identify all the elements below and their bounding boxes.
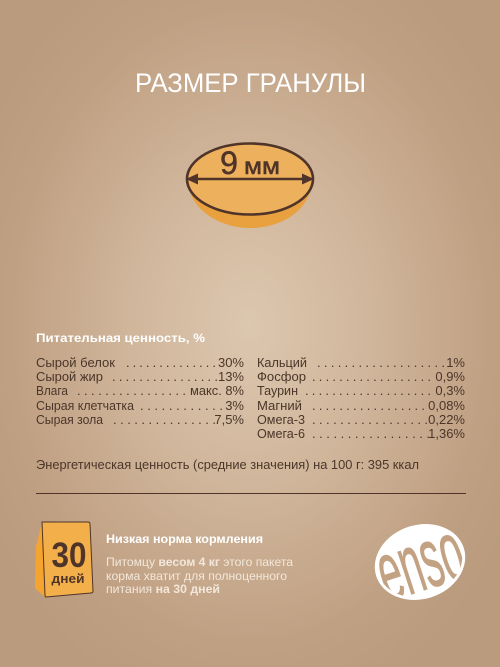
nutrition table: right column: 0,22% [428, 412, 465, 427]
icon: kibble granule with 9 mm size: 9 [220, 145, 238, 181]
nutrition table: right column [257, 355, 465, 441]
icon: kibble granule with 9 mm size: мм [244, 153, 280, 179]
nutrition table: right column: ................... [305, 383, 431, 398]
nutrition table: left column: 30% [218, 355, 244, 370]
nutrition table: right column: .................. [312, 369, 431, 384]
nutrition table: right column: 1,36% [428, 426, 465, 441]
nutrition table: right column: ................. [312, 412, 428, 427]
nutrition table: left column: Сырая клетчатка [36, 398, 135, 413]
nutrition table: left column: ................ [112, 369, 218, 384]
nutrition table: left column: Сырой жир [36, 369, 103, 384]
nutrition table: left column: ................ [77, 383, 186, 398]
nutrition table: right column: Омега-6 [257, 426, 305, 441]
nutrition table: left column: 3% [225, 398, 244, 413]
nutrition table: left column: 13% [218, 369, 244, 384]
nutrition table: left column [36, 355, 244, 427]
nutrition table: left column: ............... [113, 412, 216, 427]
nutrition table: right column: ................. [312, 426, 430, 441]
heading: low feeding rate: Низкая норма кормления [106, 532, 263, 546]
icon: food bag 30 days: 30 [52, 536, 86, 575]
nutrition table: left column: Сырая зола [36, 412, 104, 427]
icon: food bag 30 days [35, 522, 93, 597]
feeding rate description: питания на 30 дней [106, 582, 220, 596]
nutrition table: right column: 0,08% [428, 398, 465, 413]
nutrition table: left column: Влага [36, 383, 69, 398]
nutrition table: left column: .............. [126, 355, 216, 370]
feeding rate description [106, 555, 293, 596]
nutrition table: right column: 0,9% [435, 369, 465, 384]
feeding rate description: корма хватит для полноценного [106, 569, 287, 583]
nutrition table: right column: Кальций [257, 355, 307, 370]
nutrition table: right column: 0,3% [435, 383, 465, 398]
nutrition table: left column: макс. 8% [190, 383, 244, 398]
nutrition table: left column: ............ [140, 398, 223, 413]
nutrition table: right column: Фосфор [257, 369, 306, 384]
nutrition table: right column: ................... [317, 355, 445, 370]
nutrition table: right column: 1% [446, 355, 465, 370]
title: РАЗМЕР ГРАНУЛЫ [135, 68, 366, 98]
energy value text: Энергетическая ценность (средние значения) на 100 г: 395 ккал [36, 457, 419, 472]
icon: kibble granule with 9 mm size [186, 144, 314, 228]
nutrition table: left column: Сырой белок [36, 355, 115, 370]
feeding rate description: Питомцу весом 4 кг этого пакета [106, 555, 293, 569]
heading: nutrition: Питательная ценность, % [36, 331, 205, 345]
nutrition table: right column: ................. [312, 398, 425, 413]
nutrition table: left column: 7,5% [214, 412, 244, 427]
icon: food bag 30 days: дней [52, 571, 85, 586]
nutrition table: right column: Таурин [257, 383, 298, 398]
nutrition table: right column: Омега-3 [257, 412, 305, 427]
nutrition table: right column: Магний [257, 398, 302, 413]
logo: enso [374, 524, 466, 600]
